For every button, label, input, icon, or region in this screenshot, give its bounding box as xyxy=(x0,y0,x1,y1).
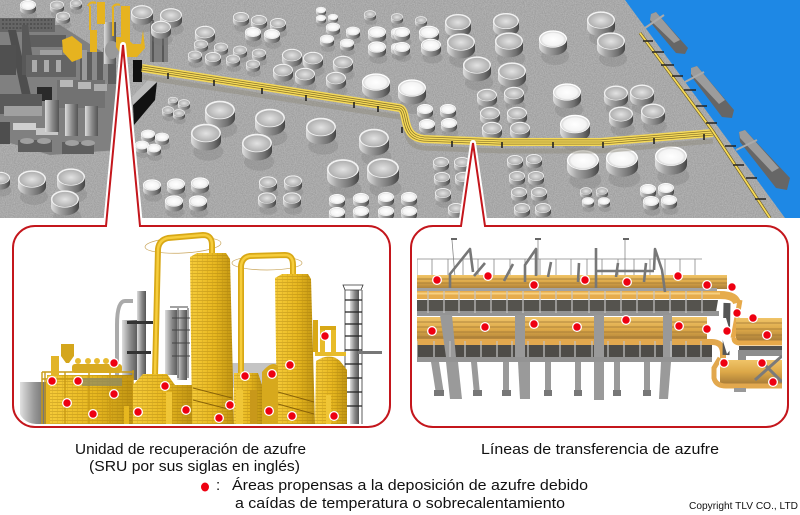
yellow base blocks xyxy=(133,320,347,424)
sulfur transfer pipeline xyxy=(142,33,770,218)
legend text xyxy=(216,477,588,512)
deposition points: transfer lines xyxy=(427,271,778,387)
grey process columns xyxy=(20,291,277,424)
pipe rack illustration xyxy=(417,239,782,400)
caption: sulfur recovery unit: (SRU por sus siglas en inglés) xyxy=(89,458,300,475)
yellow vessel left xyxy=(42,344,134,424)
sulfur recovery unit in yellow xyxy=(62,2,145,62)
legend text: a caídas de temperatura o sobrecalentamiento xyxy=(235,495,565,512)
legend text: : xyxy=(216,477,220,494)
rack columns xyxy=(440,315,672,357)
copyright: Copyright TLV CO., LTD xyxy=(689,501,798,512)
dark riser pipes on top deck xyxy=(450,248,665,292)
legend dot xyxy=(201,482,209,492)
grey chimney with lattice xyxy=(343,285,382,424)
deposition points: SRU xyxy=(47,331,339,423)
sulfur recovery unit illustration xyxy=(20,235,382,424)
storage tanks xyxy=(0,0,689,227)
ground noise texture xyxy=(0,0,800,218)
process area buildings xyxy=(0,18,168,155)
rail posts xyxy=(417,291,702,357)
upper pipe deck xyxy=(417,275,737,316)
yellow towers xyxy=(190,253,315,424)
sea xyxy=(625,0,800,218)
caption: sulfur recovery unit xyxy=(75,441,306,475)
yellow gooseneck pipes and rings xyxy=(145,235,302,375)
lower pipe deck xyxy=(417,317,723,362)
ground xyxy=(0,0,800,218)
legend xyxy=(201,477,588,512)
right side bend and lower block xyxy=(714,300,782,392)
refinery aerial overview xyxy=(0,0,800,227)
panel: sulfur recovery unit with callout wedge xyxy=(13,45,390,427)
caption: transfer lines: Líneas de transferencia de azufre xyxy=(481,441,719,458)
tanker ships xyxy=(645,12,790,190)
lights and top handrail xyxy=(417,238,702,275)
rack legs xyxy=(431,362,671,400)
caption: sulfur recovery unit: Unidad de recuperación de azufre xyxy=(75,441,306,458)
legend text: Áreas propensas a la deposición de azufre debido xyxy=(232,477,588,494)
panel: sulfur transfer lines with callout wedge xyxy=(411,143,788,427)
dark building xyxy=(132,60,157,125)
